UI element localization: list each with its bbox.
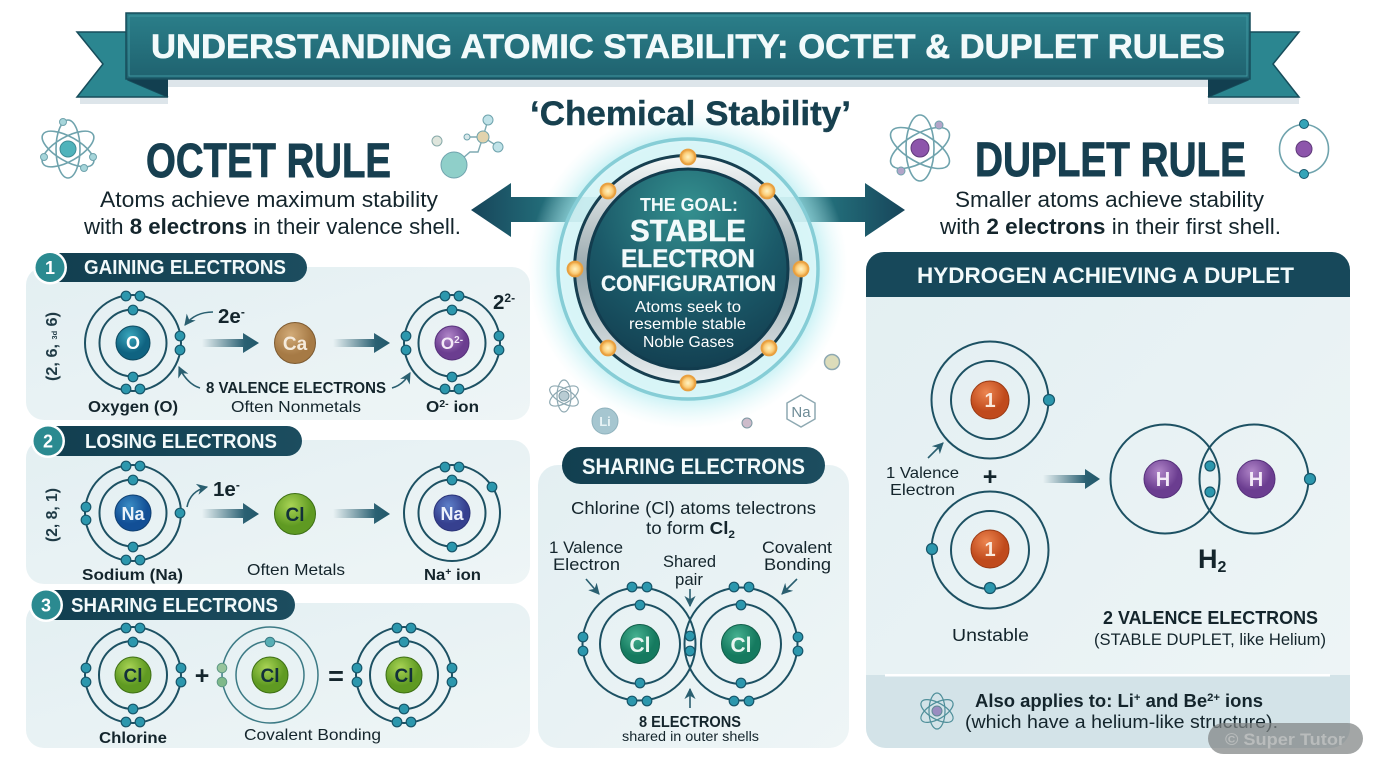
label: chlorine: Chlorine [99,730,167,747]
label: sodium ion: + [445,567,452,578]
text: duplet description [939,187,1281,239]
label: covalent bonding: Bonding [764,555,831,574]
header: hydrogen [866,252,1350,297]
header: sharing electrons: 3 [41,596,51,616]
label: oxygen: Oxygen (O) [88,399,178,416]
plus: + [195,662,209,690]
molecule: H2 [1110,424,1316,534]
atom: hydrogen bottom [926,492,1048,608]
label: 2e-: 2e [218,305,241,328]
label: sodium ion: Na [424,567,444,584]
atom: chlorine C: Cl [394,666,414,687]
header: sharing electrons centre [562,447,825,484]
header: hydrogen: HYDROGEN ACHIEVING A DUPLET [917,263,1295,288]
badge text: THE GOAL: [640,195,738,215]
atom: chlorine: Cl [286,505,304,526]
text: also applies: (which have a helium-like structure). [965,712,1278,732]
arrow: electrons in [185,312,213,325]
heading: octet rule: OCTET RULE [146,135,391,188]
text: also applies: and Be [1140,691,1207,711]
atom: hydrogen bottom: 1 [984,539,996,561]
molecule: Cl2: Cl [630,634,650,657]
badge text: Noble Gases [643,334,734,351]
atom: hydrogen top: 1 [984,390,996,412]
label: H2: 2 [1218,559,1226,576]
arrow: electron out [187,487,207,507]
title banner [77,13,1299,104]
header: sharing electrons [29,588,295,622]
arrow: valence right [392,373,410,388]
label: oxide ion: O [426,399,438,416]
label: 2 2-: 2- [504,291,515,305]
label: 8 electrons [622,714,759,744]
label: oxide ion: ion [449,399,479,416]
atom: calcium [274,322,316,364]
text: also applies: + [1134,692,1140,704]
label: 1 valence electron [886,465,959,499]
equals: = [328,661,344,691]
panel: losing electrons [26,424,530,584]
decorative icons around badge [547,354,840,434]
atom: sodium ion [404,462,500,561]
icon: small atom [917,693,957,729]
vertical label: oxygen configuration: (2, 6, 3d 6) [44,312,61,381]
panel: sharing electrons centre [538,447,849,748]
atom: hydrogen top [932,342,1054,458]
text: chlorine description: Chlorine (Cl) atoms telectrons [571,498,816,518]
label: 2 valence electrons [1094,608,1326,649]
atom: oxide ion [401,291,504,394]
label: covalent bonding [762,538,832,574]
label: 1 valence electron: Electron [553,555,620,574]
badge text: Atoms seek to [635,299,741,316]
header: gaining electrons: GAINING ELECTRONS [84,257,286,279]
atom: sodium [81,461,185,565]
label: shared pair: Shared [663,552,716,571]
arrow: right [780,183,905,237]
label: 2e-: - [241,305,245,319]
text: octet description: with 8 electrons in their valence shell. [83,214,461,239]
text: also applies: ions [1220,691,1263,711]
vertical label: sodium configuration: (2, 8, 1) [44,488,61,542]
atom: oxygen: O [126,333,140,353]
arrow: flow to sodium ion [333,503,390,524]
label: oxide ion: 2- [439,399,449,410]
label: often metals: Often Metals [247,562,345,579]
panel: sharing electrons left [26,588,530,748]
label: 8 electrons: shared in outer shells [622,729,759,744]
badge text: CONFIGURATION [601,271,776,296]
label: 2 valence electrons: 2 VALENCE ELECTRONS [1103,608,1318,628]
atom: chlorine B [217,627,318,723]
watermark: © Super Tutor [1225,730,1345,749]
label: 8 electrons: 8 ELECTRONS [639,714,741,731]
decorative icons around badge: Na [791,404,811,421]
icon: atom top left [37,118,99,178]
badge text: ELECTRON [621,245,755,273]
header: losing electrons: 2 [43,432,53,452]
header: gaining electrons [33,250,307,284]
label: 1 valence electron: 1 Valence [886,465,959,482]
atom: sodium: Na [121,504,145,524]
watermark [1208,723,1363,754]
label: 1 valence electron: Electron [890,482,955,499]
glowing electrons [568,150,808,390]
atom: oxide ion: O [441,334,454,353]
central goal badge [528,109,848,429]
label: unstable: Unstable [952,625,1029,645]
title text: UNDERSTANDING ATOMIC STABILITY: OCTET & DUPLET RULES [151,28,1225,66]
arrow: left [471,183,600,237]
label: sodium: Sodium (Na) [82,567,183,584]
badge text: STABLE [630,213,746,248]
text: chlorine description [571,498,816,541]
molecule: Cl2 [578,582,803,706]
atom: chlorine B: Cl [260,666,280,687]
text: octet description: Atoms achieve maximum stability [100,187,439,212]
text: octet description [83,187,461,239]
arrow: flow to ion [333,333,390,353]
molecule: Cl2: Cl [730,634,752,657]
header: sharing electrons centre: SHARING ELECTRONS [582,454,805,479]
text: also applies: Also applies to: Li [975,691,1130,711]
badge text [601,195,776,351]
molecule: H2: H [1249,469,1263,491]
atom: chlorine C [352,623,457,727]
label: 2 valence electrons: (STABLE DUPLET, like Helium) [1094,631,1326,649]
arrow: flow to calcium [202,333,259,353]
atom: chlorine A: Cl [124,666,142,687]
header: losing electrons: LOSING ELECTRONS [85,431,277,453]
arrow: valence [928,443,943,458]
header: sharing electrons: SHARING ELECTRONS [71,595,278,617]
label: often nonmetals: Often Nonmetals [231,399,361,416]
label: 1e-: - [236,478,240,492]
decorative icons around badge: Li [599,414,611,429]
label: covalent bonding: Covalent Bonding [244,727,381,744]
label: 8 valence electrons: 8 VALENCE ELECTRONS [206,380,386,397]
atom: oxygen [85,291,185,394]
badge text: resemble stable [629,316,746,333]
label: sodium ion: ion [451,567,481,584]
text: also applies: 2+ [1207,692,1220,704]
label: 1e-: 1e [213,478,236,501]
footer strip [866,674,1350,748]
molecule: H2: H [1156,469,1170,491]
icon: molecule [432,115,503,178]
text: duplet description: Smaller atoms achieve stability [955,187,1265,212]
label: 1 valence electron: 1 Valence [549,538,623,557]
panel: gaining electrons [26,250,530,420]
label: shared pair [663,552,716,589]
text: duplet description: with 2 electrons in their first shell. [939,214,1281,239]
arrow: to H2 [1043,469,1100,489]
plus: + [983,463,997,491]
header: gaining electrons: 1 [45,258,55,278]
label: covalent bonding: Covalent [762,538,832,557]
arrow: valence left [179,367,200,388]
atom: calcium: Ca [283,334,308,355]
atom: oxide ion: 2- [454,335,463,346]
icon: small atom duplet [1280,120,1328,178]
atom: chlorine [274,494,316,534]
arrows: callouts [586,579,797,708]
subtitle: ‘Chemical Stability’ [530,95,851,133]
text: also applies [965,691,1278,732]
icon: atom duplet [884,115,956,181]
text: chlorine description: to form Cl [646,518,727,538]
arrow: flow to chlorine [202,503,259,524]
label: 1 valence electron [549,538,623,574]
label: 2 2-: 2 [493,291,504,314]
label: shared pair: pair [675,570,703,589]
heading: duplet rule: DUPLET RULE [975,134,1246,187]
panel: hydrogen achieving a duplet [866,252,1350,748]
header: losing electrons [31,424,302,458]
atom: sodium ion: Na [440,504,464,524]
text: chlorine description: 2 [728,529,735,541]
label: H2: H [1198,544,1218,574]
atom: chlorine A [81,623,186,727]
